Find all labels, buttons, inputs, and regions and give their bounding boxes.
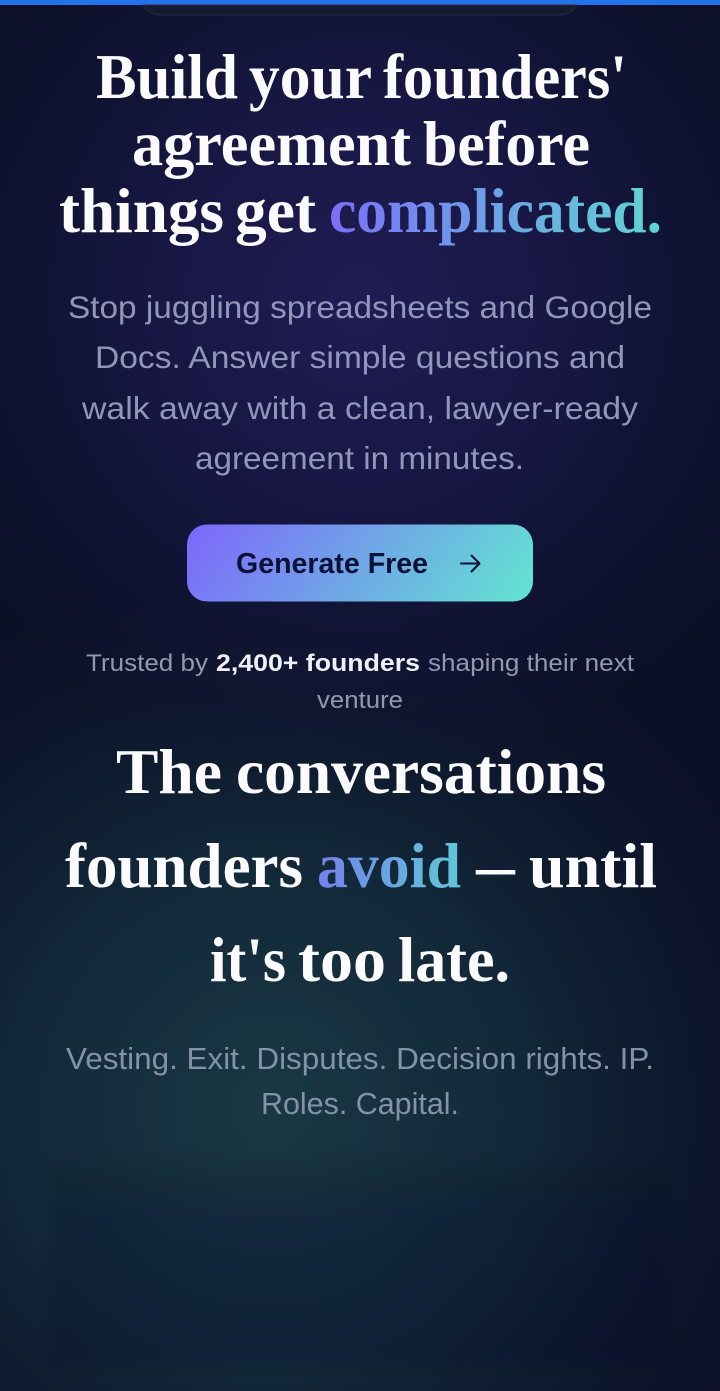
section heading: avoid (317, 830, 461, 901)
social proof text (86, 650, 634, 714)
section heading (65, 736, 657, 995)
hero title: your (249, 41, 372, 112)
button: generate free (187, 524, 533, 602)
hero title: complicated. (329, 175, 662, 246)
icon: arrow (461, 556, 480, 572)
section subtext: Vesting. Exit. Disputes. Decision rights. IP. (66, 1042, 654, 1076)
hero description (68, 289, 652, 476)
hero title: founders' (383, 41, 627, 112)
section heading: too (298, 924, 386, 995)
section subtext (66, 1042, 654, 1121)
section subtext: Roles. Capital. (261, 1087, 459, 1121)
hero title (59, 41, 662, 246)
hero description: Docs. Answer simple questions and (95, 339, 625, 375)
social proof text: venture (317, 687, 403, 714)
hero title: Build (96, 41, 238, 112)
hero title: before (423, 108, 590, 179)
social proof text: Trusted by (86, 650, 209, 677)
faded card placeholder (50, 1150, 670, 1365)
hero description: Stop juggling spreadsheets and Google (68, 289, 652, 325)
hero title: get (235, 175, 317, 246)
section heading: conversations (236, 736, 606, 807)
hero description: walk away with a clean, lawyer-ready (81, 390, 638, 426)
button: generate free: Generate Free (236, 548, 428, 580)
hero description: agreement in minutes. (195, 440, 524, 476)
hero title: agreement (132, 108, 412, 179)
section heading: founders (65, 830, 303, 901)
top accent bar (0, 0, 720, 5)
section heading: until (529, 830, 657, 901)
section heading: late. (398, 924, 510, 995)
section heading: The (116, 736, 222, 807)
section heading: it's (210, 924, 286, 995)
section heading: — (475, 830, 516, 901)
hero title: things (59, 175, 224, 246)
top navigation pill edge (143, 5, 577, 15)
social proof text: 2,400+ founders (216, 650, 420, 677)
social proof text: shaping their next (428, 650, 634, 677)
